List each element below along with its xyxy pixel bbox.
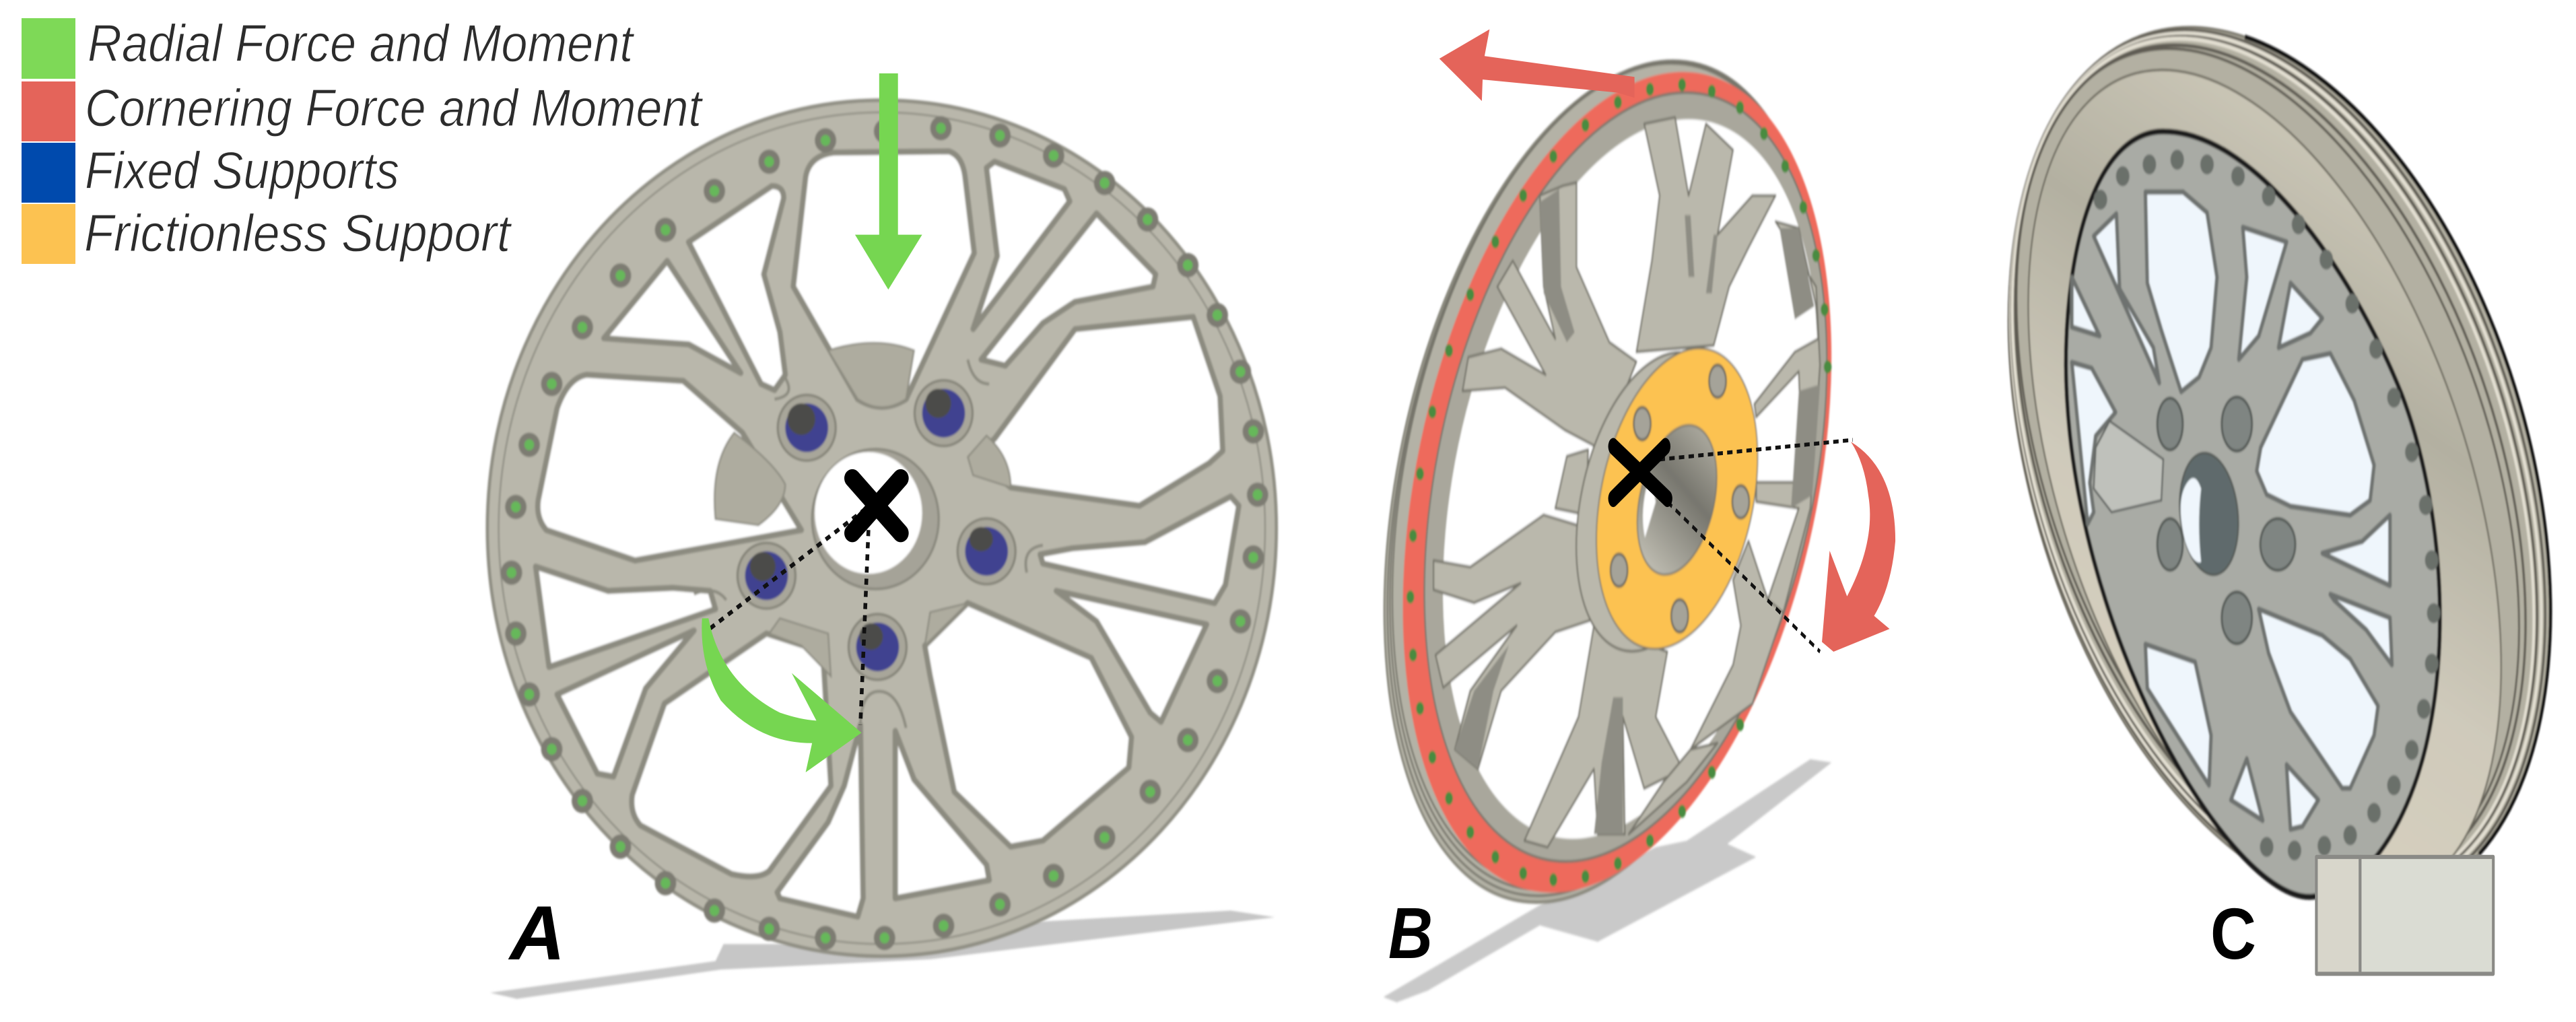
hub bolt holes B	[1611, 365, 1749, 632]
legend swatch: radial force and moment	[22, 18, 75, 79]
wheel face C	[2066, 131, 2440, 897]
legend	[22, 13, 704, 264]
hub recess shapes A	[714, 343, 1011, 676]
radial force arrow	[855, 73, 922, 289]
legend label: cornering force and moment: Cornering Force and Moment	[85, 78, 704, 137]
centre bore A	[812, 449, 939, 589]
wheel C	[1897, 0, 2576, 1022]
legend label: fixed supports: Fixed Supports	[85, 141, 399, 200]
cornering force arrow	[1439, 30, 1635, 101]
outer rim with grooves C	[1897, 0, 2576, 1022]
label A: A	[508, 891, 565, 976]
spoke windows A	[536, 151, 1239, 916]
hub recess C	[2094, 421, 2163, 512]
panel C: wheel on frictionless support, rear view	[1897, 0, 2576, 1022]
moment arm dotted lines A	[708, 509, 869, 725]
legend swatch: frictionless support	[22, 204, 75, 264]
centre marker X A	[852, 478, 901, 533]
rim bolts C	[2101, 160, 2434, 850]
outer rim with grooves B	[1293, 0, 1914, 1022]
moment arm dotted lines B	[1660, 440, 1853, 652]
hub bolt holes: fixed supports	[737, 380, 1015, 680]
label C: C	[2210, 893, 2256, 974]
spokes B	[1433, 117, 1820, 847]
red cornering load face B	[1314, 0, 1920, 1022]
centre marker X B	[1613, 446, 1667, 499]
rim bolts B	[1411, 85, 1828, 880]
legend label: radial force and moment: Radial Force and Moment	[88, 13, 635, 73]
dark spoke pockets B	[1455, 189, 1820, 834]
hub bolt holes C	[2157, 397, 2295, 644]
block right face	[2360, 857, 2493, 974]
panel B: wheel with cornering force and moment	[1293, 0, 1920, 1022]
radial moment arrow	[702, 618, 861, 772]
panel A: wheel with radial force and moment	[487, 73, 1277, 999]
spoke windows C	[2072, 192, 2392, 829]
wheel B	[1293, 0, 1920, 1022]
spoke groove outlines A	[694, 360, 1043, 728]
legend label: frictionless support: Frictionless Support	[84, 203, 512, 263]
black outer edge C	[2245, 37, 2550, 854]
centre bore C	[2172, 445, 2245, 583]
ground shadow A	[490, 910, 1275, 999]
rim bolt holes A	[512, 128, 1258, 938]
barrel ring B	[1341, 0, 1910, 990]
legend swatch: fixed supports	[22, 143, 75, 203]
label B: B	[1388, 892, 1433, 974]
frictionless support block	[2316, 857, 2493, 974]
rim disc A	[487, 100, 1277, 956]
wheel opening B	[1365, 0, 1896, 958]
inner rim band C	[1931, 0, 2576, 1022]
centre bore B	[1621, 399, 1733, 601]
legend swatch: cornering force and moment	[22, 81, 75, 141]
ground shadow B	[1384, 759, 1831, 1002]
wheel A	[487, 100, 1277, 956]
yellow frictionless support face	[1563, 296, 1791, 701]
cornering moment arrow	[1822, 442, 1895, 652]
hub barrel B	[1543, 301, 1768, 703]
block left face	[2316, 857, 2360, 974]
